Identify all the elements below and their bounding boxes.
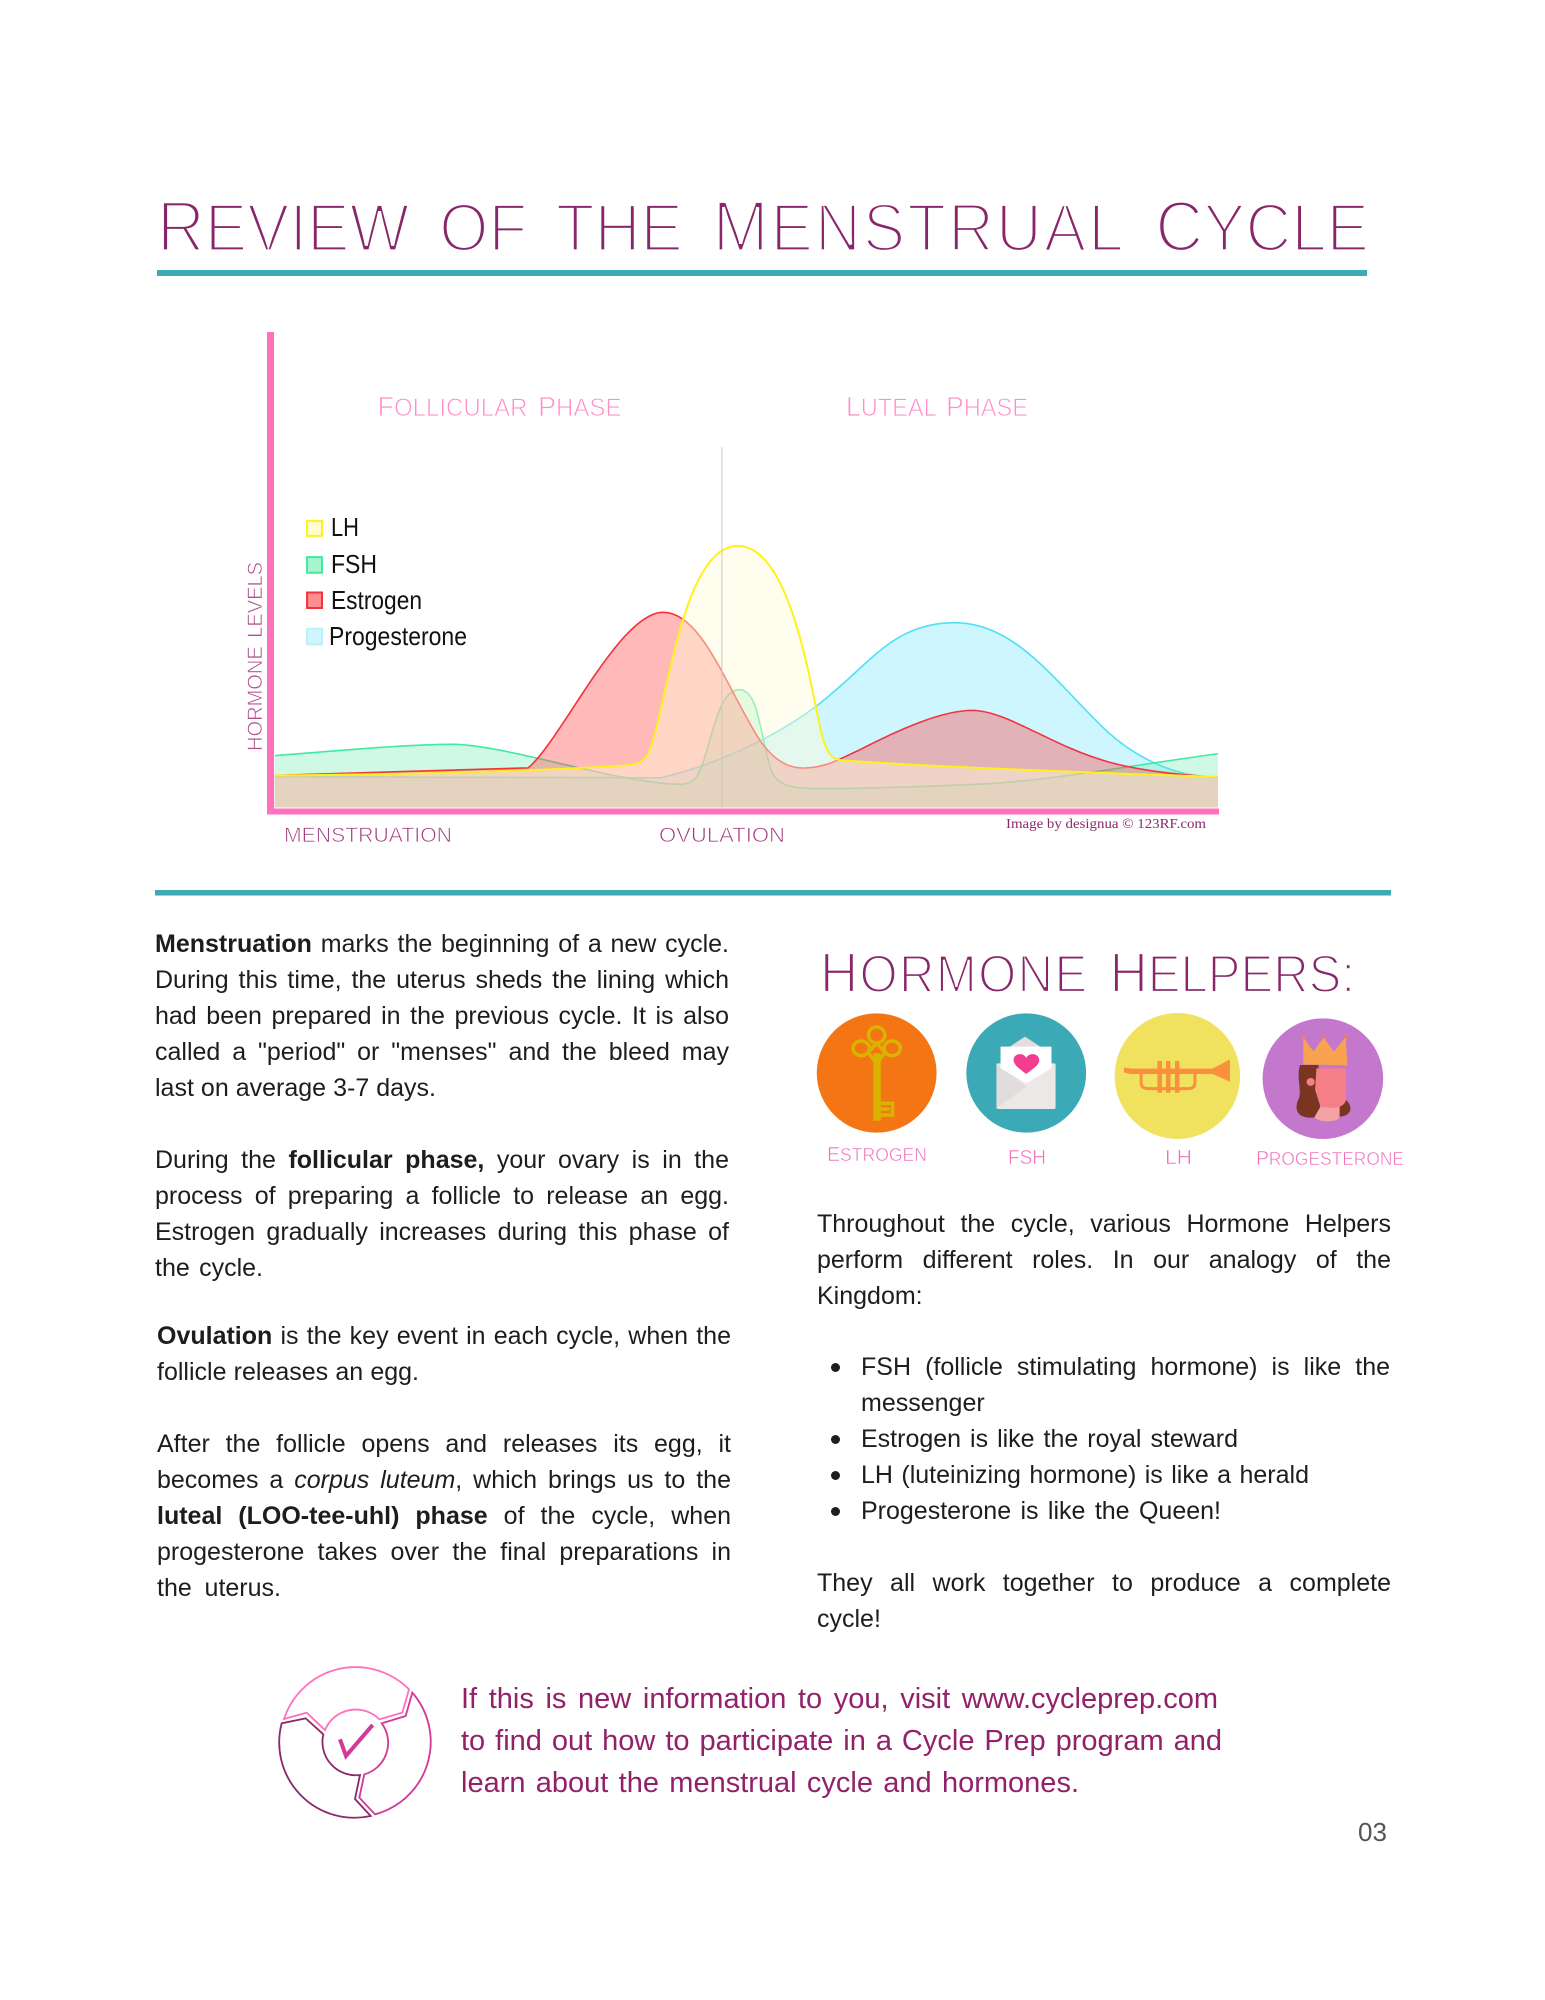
text: menstruation paragraph: last on average 3-7 days. xyxy=(155,1074,436,1102)
logo top segment xyxy=(284,1667,409,1730)
luteal phase label: LUTEAL PHASE xyxy=(846,391,1028,422)
progesterone icon label: PROGESTERONE xyxy=(1256,1148,1404,1170)
hormone helpers heading: HORMONE HELPERS: xyxy=(820,941,1355,1005)
text: follicular phase paragraph xyxy=(155,1146,729,1282)
callout: visit cycleprep: to find out how to participate in a Cycle Prep program and xyxy=(461,1725,1222,1757)
text: ovulation paragraph xyxy=(157,1322,731,1386)
hormone helper icons xyxy=(817,1013,1383,1139)
icon: progesterone queen xyxy=(1263,1018,1383,1139)
legend LH: LH xyxy=(331,512,359,542)
text: menstruation paragraph: had been prepared in the previous cycle. It is also xyxy=(155,1002,729,1030)
text: luteal phase paragraph: becomes a corpus luteum, which brings us to the xyxy=(157,1466,731,1494)
icon: FSH envelope xyxy=(966,1013,1086,1133)
text: hormone helpers intro: Kingdom: xyxy=(817,1282,923,1310)
image credit: Image by designua © 123RF.com xyxy=(1006,816,1207,831)
text: closing line: They all work together to produce a complete xyxy=(817,1569,1391,1597)
list: hormone roles xyxy=(831,1353,1390,1525)
LH curve xyxy=(275,546,1218,807)
icon: estrogen key xyxy=(817,1013,937,1133)
list: hormone roles: Progesterone is like the Queen! xyxy=(861,1497,1221,1525)
legend swatch progesterone xyxy=(307,629,322,644)
text: luteal phase paragraph: luteal (LOO-tee-uhl) phase of the cycle, when xyxy=(157,1502,731,1530)
follicular phase label: FOLLICULAR PHASE xyxy=(378,391,622,422)
legend progesterone: Progesterone xyxy=(329,621,467,651)
list: hormone roles: Estrogen is like the royal steward xyxy=(861,1425,1238,1453)
text: luteal phase paragraph xyxy=(157,1430,731,1602)
ovulation label: OVULATION xyxy=(659,824,785,847)
callout: visit cycleprep: If this is new information to you, visit www.cycleprep.com xyxy=(461,1683,1218,1715)
text: hormone helpers intro xyxy=(817,1210,1391,1310)
y axis xyxy=(267,332,274,814)
text: ovulation paragraph: follicle releases an egg. xyxy=(157,1358,419,1386)
text: follicular phase paragraph: During the follicular phase, your ovary is in the xyxy=(155,1146,729,1174)
page number: 03 xyxy=(1358,1817,1387,1847)
text: closing line: cycle! xyxy=(817,1605,881,1633)
icon: cycle check logo xyxy=(279,1667,431,1818)
text: follicular phase paragraph: process of preparing a follicle to release an egg. xyxy=(155,1182,729,1210)
y axis label: HORMONE LEVELS xyxy=(244,562,267,751)
logo check mark xyxy=(340,1725,373,1756)
FSH icon label: FSH xyxy=(1008,1147,1046,1169)
text: luteal phase paragraph: the uterus. xyxy=(157,1574,281,1602)
LH icon label: LH xyxy=(1165,1147,1192,1169)
FSH curve xyxy=(275,690,1218,807)
title rule xyxy=(157,270,1367,276)
x axis xyxy=(267,808,1219,814)
text: menstruation paragraph: called a "period" or "menses" and the bleed may xyxy=(155,1038,729,1066)
list: hormone roles: FSH (follicle stimulating hormone) is like the xyxy=(861,1353,1390,1381)
text: menstruation paragraph: During this time, the uterus sheds the lining which xyxy=(155,966,729,994)
text: follicular phase paragraph: the cycle. xyxy=(155,1254,263,1282)
legend swatch estrogen xyxy=(307,592,322,608)
callout: visit cycleprep xyxy=(461,1683,1222,1799)
menstruation label: MENSTRUATION xyxy=(284,824,452,847)
legend swatch LH xyxy=(307,521,322,536)
legend estrogen: Estrogen xyxy=(331,585,422,615)
callout: visit cycleprep: learn about the menstrual cycle and hormones. xyxy=(461,1767,1079,1799)
text: hormone helpers intro: Throughout the cycle, various Hormone Helpers xyxy=(817,1210,1391,1238)
text: closing line xyxy=(817,1569,1391,1633)
title: REVIEW OF THE MENSTRUAL CYCLE xyxy=(157,187,1369,267)
logo left segment xyxy=(279,1718,371,1818)
text: follicular phase paragraph: Estrogen gradually increases during this phase of xyxy=(155,1218,729,1246)
icon: LH trumpet xyxy=(1115,1013,1240,1139)
legend swatch FSH xyxy=(307,557,322,573)
list: hormone roles: LH (luteinizing hormone) is like a herald xyxy=(861,1461,1309,1489)
text: luteal phase paragraph: After the follicle opens and releases its egg, it xyxy=(157,1430,731,1458)
legend FSH: FSH xyxy=(331,549,377,579)
text: luteal phase paragraph: progesterone takes over the final preparations in xyxy=(157,1538,731,1566)
estrogen curve xyxy=(275,612,1218,807)
text: menstruation paragraph xyxy=(155,930,729,1102)
hormone chart xyxy=(244,332,1219,847)
text: ovulation paragraph: Ovulation is the key event in each cycle, when the xyxy=(157,1322,731,1350)
logo right segment xyxy=(359,1693,431,1814)
section rule xyxy=(155,890,1391,896)
text: menstruation paragraph: Menstruation marks the beginning of a new cycle. xyxy=(155,930,729,958)
chart curves xyxy=(275,447,1218,807)
estrogen icon label: ESTROGEN xyxy=(827,1144,927,1166)
list: hormone roles: messenger xyxy=(861,1389,985,1417)
progesterone curve xyxy=(275,623,1218,807)
ovulation line xyxy=(721,447,723,807)
text: hormone helpers intro: perform different roles. In our analogy of the xyxy=(817,1246,1391,1274)
